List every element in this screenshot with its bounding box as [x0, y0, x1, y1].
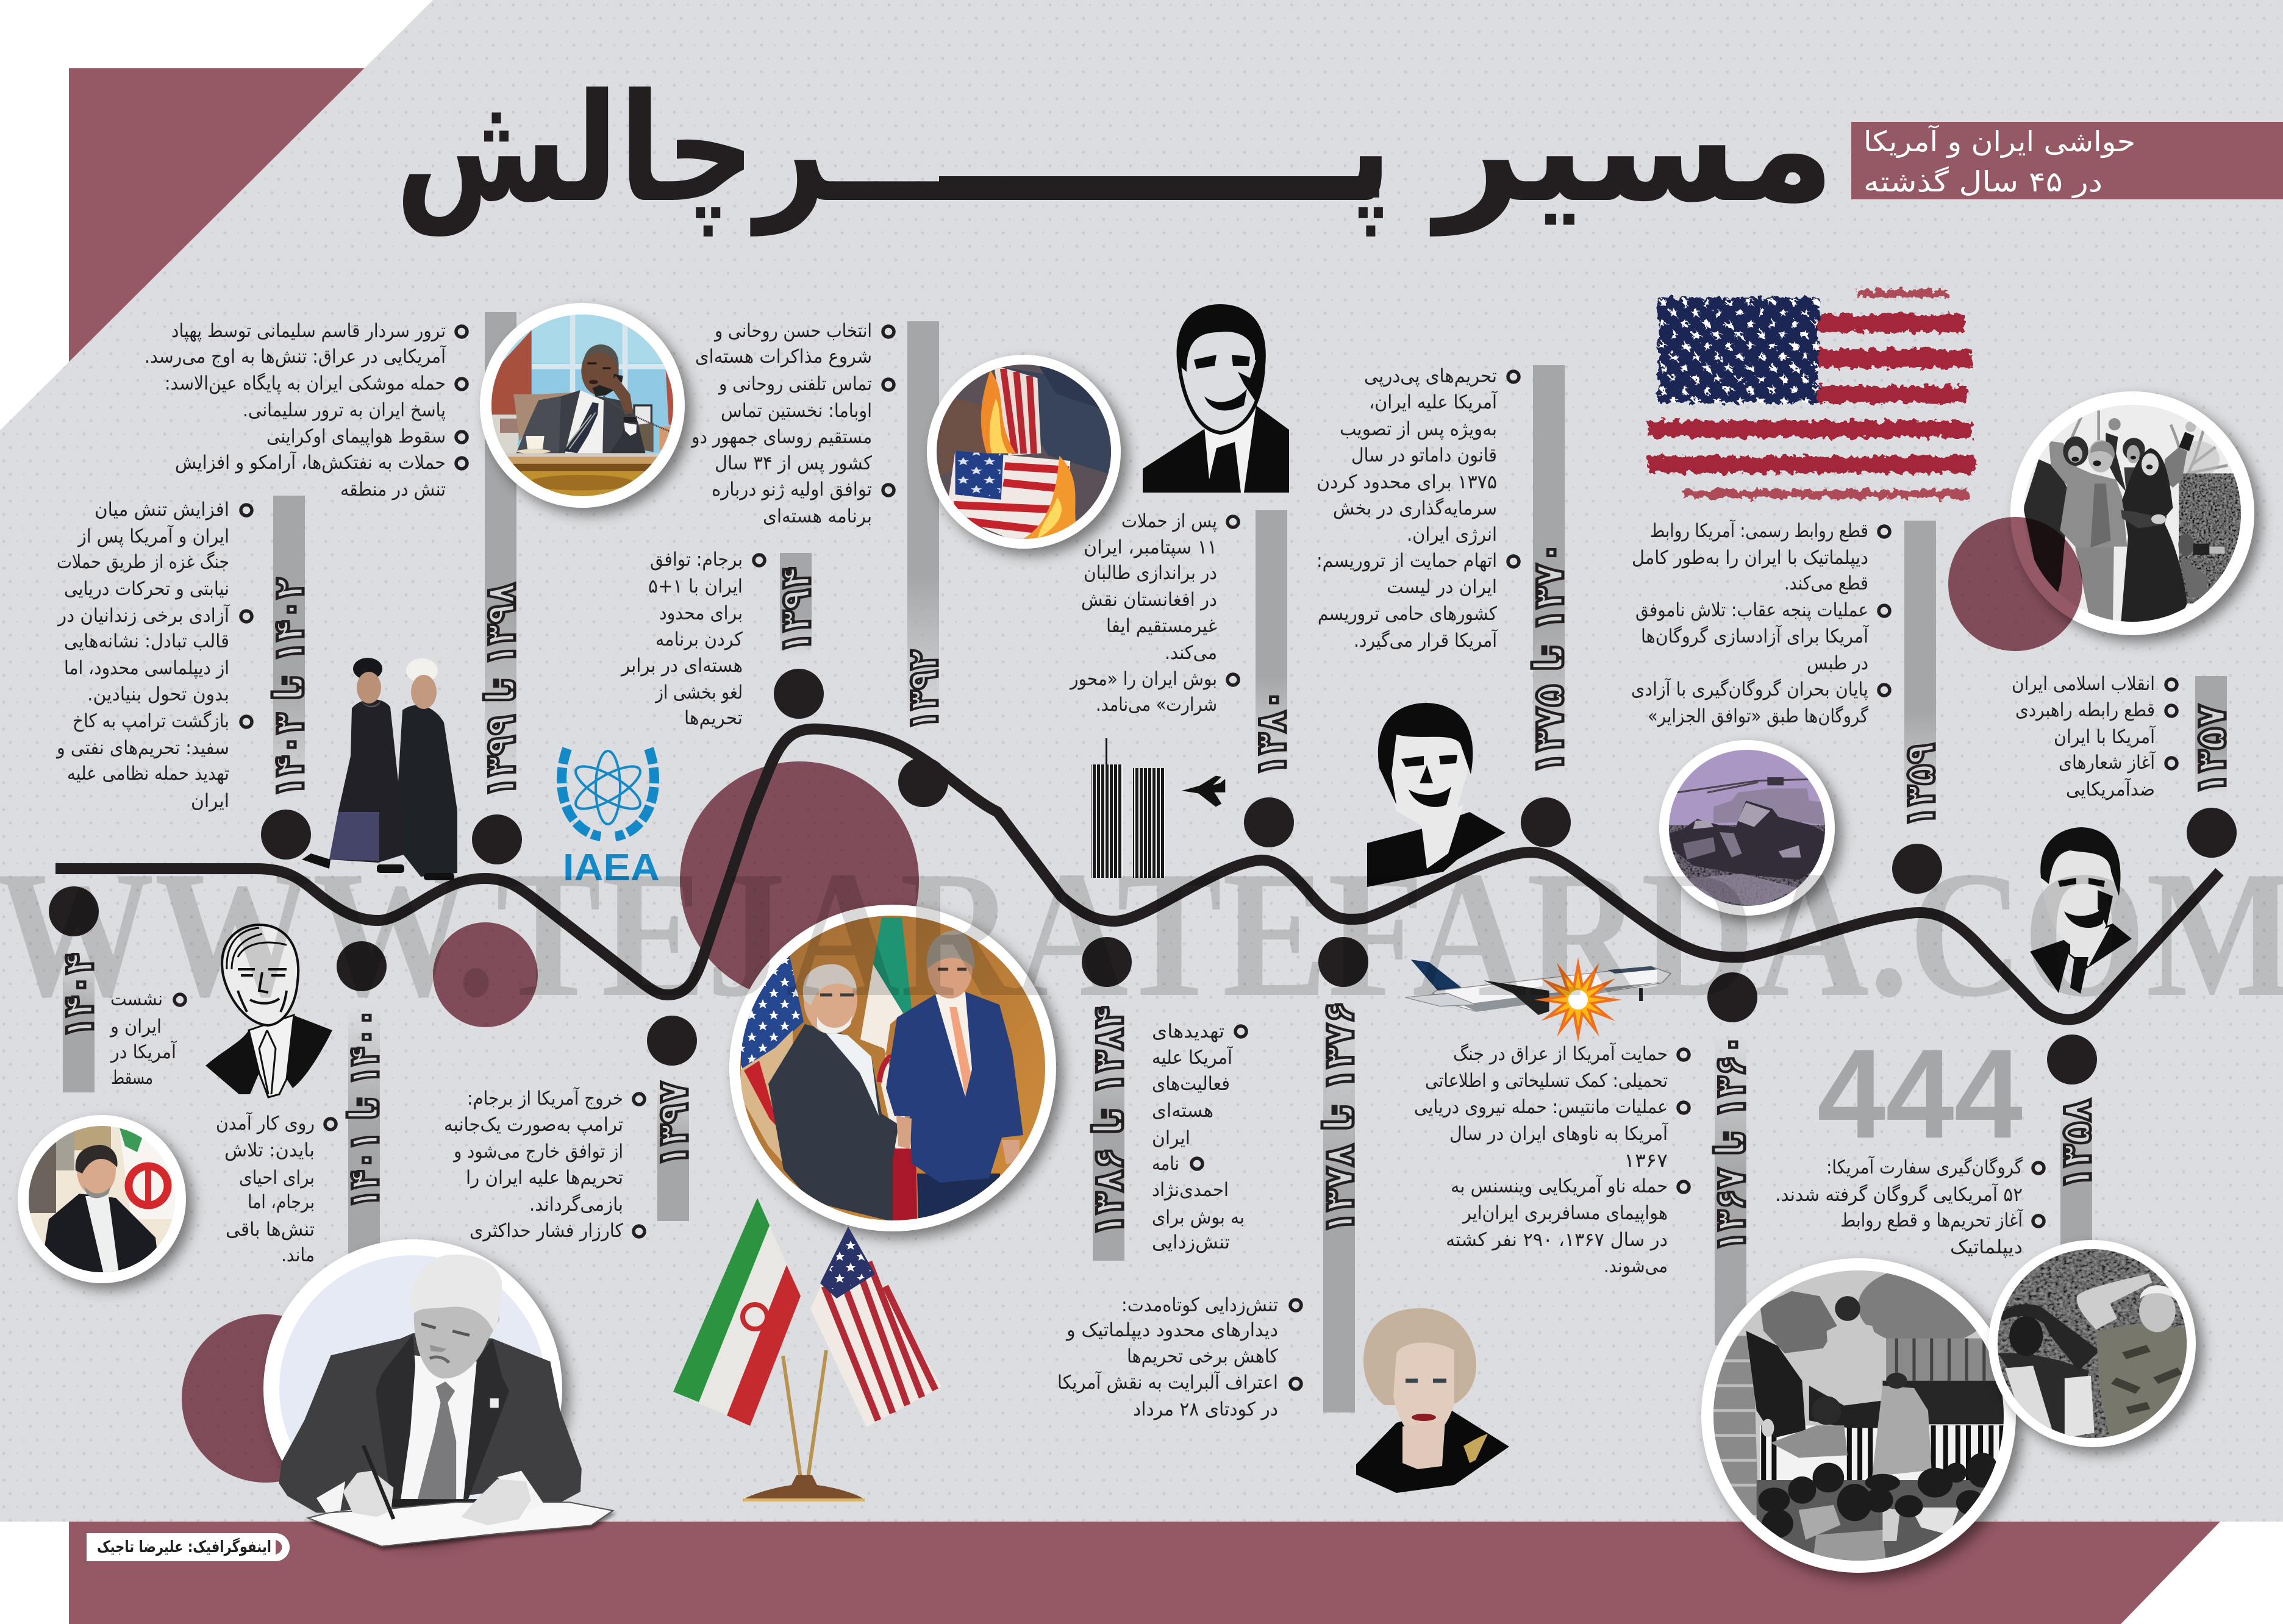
text block: 1404 events: نشست — [110, 988, 163, 1010]
image: Iran Air plane with explosion — [1405, 957, 1671, 1042]
photo: Obama on phone — [480, 303, 685, 508]
text block: 1400-1401 events: روی کار آمدن — [216, 1111, 315, 1134]
text block: 1360-1367 events: هواپیمای مسافربری ایران‌ایر — [1462, 1202, 1668, 1224]
text block: 1394 events: برجام: توافق — [650, 549, 743, 571]
text block: 1402-1403 events: نیابتی و تحرکات دریایی — [64, 578, 229, 600]
text block: 1402-1403 events: جنگ غزه از طریق حملات — [57, 551, 229, 573]
year bar 1370-1375: ۱۳۷۰ تا ۱۳۷۵ — [1525, 541, 1573, 774]
year bar 1402-1403: ۱۴۰۲ تا ۱۴۰۳ — [265, 577, 313, 797]
text block: 1404 events — [109, 988, 185, 1089]
text block: 1370-1375 events: اتهام حمایت از تروریسم: — [1317, 550, 1497, 572]
text block: 1402-1403 events: ایران — [191, 790, 229, 812]
text block: 1370-1375 events: به‌ویژه پس از تصویب — [1340, 418, 1497, 440]
text block: 1384-1386 events: به بوش برای — [1152, 1206, 1245, 1228]
year bar 1359 — [1896, 521, 1944, 827]
text block: 1380 events: غیرمستقیم ایفا — [1106, 615, 1217, 637]
text block: 1402-1403 events: آزادی برخی زندانیان در — [57, 604, 230, 627]
text block: 1380 events: در افغانستان نقش — [1081, 589, 1217, 611]
text block: 1384-1386 events: احمدی‌نژاد — [1152, 1179, 1229, 1201]
text block: 1359 events: قطع می‌کند. — [1784, 572, 1868, 594]
text block: 1402-1403 events: تهدید حمله نظامی علیه — [67, 763, 229, 785]
text block: 1397 events — [444, 1086, 645, 1242]
text block: 1360-1367 events: حمله ناو آمریکایی وینسنس به — [1451, 1174, 1668, 1197]
text block: 1392 events: تماس تلفنی روحانی و — [718, 373, 872, 395]
text block: 1360-1367 events — [1414, 1042, 1689, 1277]
text block: 1370-1375 events: ۱۳۷۵ برای محدود کردن — [1317, 471, 1497, 493]
text block: detente events — [1057, 1294, 1301, 1420]
text block: 1397 events: تحریم‌ها علیه ایران را — [466, 1167, 623, 1189]
text block: 1358 events: دیپلماتیک — [1950, 1236, 2023, 1258]
silhouette: Bill Clinton — [1367, 703, 1506, 887]
text block: 1359 events — [1631, 519, 1890, 727]
text block: 1394 events: لغو بخشی از — [654, 682, 743, 703]
text block: detente events: تنش‌زدایی کوتاه‌مدت: — [1121, 1294, 1278, 1316]
text block: 1398-1399 events: سقوط هواپیمای اوکراینی — [266, 426, 446, 447]
text block: 1384-1386 events: ایران — [1152, 1127, 1190, 1149]
photo: Araghchi — [18, 1115, 186, 1283]
text block: 1398-1399 events: حملات به نفتکش‌ها، آرامکو و افزایش — [175, 451, 446, 474]
image: distressed US flag — [1649, 290, 1975, 499]
year bar 1404: ۱۴۰۴ — [55, 953, 102, 1038]
text block: 1398-1399 events: تنش در منطقه — [340, 479, 446, 500]
year bar 1357: ۱۳۵۷ — [2187, 705, 2235, 795]
text block: 1392 events: توافق اولیه ژنو درباره — [712, 479, 872, 500]
text block: 1359 events: گروگان‌ها طبق «توافق الجزایر» — [1648, 705, 1868, 727]
text block: 1360-1367 events: در سال ۱۳۶۷، ۲۹۰ نفر کشته — [1446, 1229, 1668, 1251]
timeline dots — [49, 669, 2237, 1084]
text block: 1357 events — [2012, 673, 2177, 800]
text block: 1400-1401 events: ماند. — [281, 1244, 315, 1266]
text block: 1380 events: بوش ایران را «محور — [1069, 668, 1217, 690]
photo: Tabas helicopter wreck — [1659, 740, 1835, 916]
photo: burning US flag — [927, 355, 1125, 554]
year bar 1392: ۱۳۹۲ — [899, 650, 947, 730]
text block: 1397 events: ترامپ به‌صورت یک‌جانبه — [444, 1114, 623, 1136]
text block: 1358 events: آغاز تحریم‌ها و قطع روابط — [1840, 1208, 2023, 1231]
text block: 1398-1399 events: حمله موشکی ایران به پایگاه عین‌الاسد: — [165, 372, 446, 394]
text block: 1394 events: هسته‌ای در برابر — [620, 655, 743, 677]
illustration: Margaret Thatcher — [1356, 1308, 1509, 1493]
year bar 1360-1367: ۱۳۶۰ تا ۱۳۶۷ — [1707, 1034, 1754, 1252]
text block: 1380 events: پس از حملات — [1121, 510, 1217, 532]
text block: 1402-1403 events — [55, 499, 252, 812]
silhouette: Ronald Reagan — [2030, 827, 2132, 994]
text block: 1397 events: بازمی‌گرداند. — [529, 1194, 623, 1216]
text block: 1392 events: انتخاب حسن روحانی و — [713, 320, 872, 342]
text block: 1370-1375 events: انرژی ایران. — [1407, 524, 1497, 546]
text block: 1392 events: شروع مذاکرات هسته‌ای — [695, 346, 872, 368]
year bar 1360-1367 — [1707, 1034, 1754, 1345]
text block: 1404 events: آمریکا در — [110, 1040, 177, 1063]
text block: 1359 events: دیپلماتیک با ایران را به‌طور کامل — [1632, 547, 1868, 569]
subtitle box: حواشی ایران و آمریکا — [1863, 125, 2135, 158]
text block: 1392 events: برنامه هسته‌ای — [763, 505, 872, 527]
text block: detente events: کاهش برخی تحریم‌ها — [1127, 1345, 1278, 1367]
photo: embassy fence crowd — [1701, 1258, 2016, 1573]
text block: 1400-1401 events: برای احیای — [239, 1167, 315, 1189]
text block: 1398-1399 events: پاسخ ایران به ترور سلیمانی. — [243, 399, 446, 421]
text block: 1397 events: از توافق خارج می‌شود و — [452, 1141, 623, 1163]
text block: 1359 events: آمریکا برای آزادسازی گروگان‌ها — [1641, 624, 1869, 647]
year bar 1398-1399 — [477, 312, 524, 797]
text block: 1397 events: کارزار فشار حداکثری — [470, 1220, 623, 1242]
text block: 1384-1386 events — [1152, 1020, 1246, 1253]
text block: 1359 events: پایان بحران گروگان‌گیری با آزادی — [1631, 677, 1868, 700]
year bar 1380: ۱۳۸۰ — [1248, 689, 1295, 777]
text block: detente events: در کودتای ۲۸ مرداد — [1133, 1398, 1278, 1420]
text block: 1402-1403 events: بازگشت ترامپ به کاخ — [73, 710, 229, 732]
text block: 1370-1375 events: آمریکا علیه ایران، — [1369, 390, 1498, 413]
icon: plane — [1182, 776, 1225, 807]
year bar 1397: ۱۳۹۷ — [649, 1081, 697, 1167]
text block: 1358 events: گروگان‌گیری سفارت آمریکا: — [1826, 1155, 2023, 1178]
year bar 1400-1401: ۱۴۰۰ تا ۱۴۰۱ — [340, 1008, 388, 1208]
text block: 1398-1399 events: ترور سردار قاسم سلیمانی توسط پهپاد — [171, 320, 446, 342]
text block: 1359 events: عملیات پنجه عقاب: تلاش ناموفق — [1635, 599, 1868, 621]
silhouette: George W. Bush — [1143, 306, 1289, 493]
year bar 1359: ۱۳۵۹ — [1896, 743, 1944, 827]
logo: IAEA — [562, 749, 660, 889]
year bar 1370-1375 — [1525, 365, 1573, 774]
photo: Trump signing — [263, 1239, 613, 1547]
text block: 1402-1403 events: از دیپلماسی محدود، اما — [64, 657, 229, 679]
year bar 1358: ۱۳۵۸ — [2053, 1099, 2100, 1190]
figures: Raisi and Rouhani — [302, 658, 457, 880]
text block: 1380 events: می‌کند. — [1165, 642, 1217, 664]
text block: 1398-1399 events: آمریکایی در عراق: تنش‌ها به اوج می‌رسد. — [145, 344, 446, 368]
text block: 1358 events: ۵۲ آمریکایی گروگان گرفته شدند. — [1775, 1183, 2023, 1206]
text block: 1400-1401 events — [216, 1111, 336, 1266]
text block: 1402-1403 events: سفید: تحریم‌های نفتی و — [55, 737, 229, 759]
text block: 1392 events: کشور پس از ۳۴ سال — [715, 452, 872, 474]
text block: detente events: اعتراف آلبرایت به نقش آمریکا — [1057, 1370, 1278, 1394]
text block: 1370-1375 events — [1317, 365, 1519, 652]
text block: 1400-1401 events: برجام، اما — [248, 1191, 315, 1213]
text block: 1357 events: قطع رابطه راهبردی — [2015, 699, 2155, 721]
subtitle box: در ۴۵ سال گذشته — [1863, 165, 2103, 198]
text block: 1360-1367 events: آمریکا به ناوهای ایران در سال — [1449, 1122, 1668, 1145]
credit tag: اینفوگرافیک: علیرضا تاجیک — [97, 1537, 271, 1556]
text block: 1397 events: خروج آمریکا از برجام: — [467, 1086, 623, 1109]
text block: 1404 events: مسقط — [111, 1067, 153, 1089]
year bar 1392 — [899, 321, 947, 730]
decorative circle over revolution photo — [1948, 517, 2082, 651]
text block: 1402-1403 events: افزایش تنش میان — [95, 499, 229, 521]
text block: 1392 events: مستقیم روسای جمهور دو — [690, 426, 872, 448]
logo: IAEA: IAEA — [563, 847, 660, 889]
text block: 1384-1386 events: فعالیت‌های — [1152, 1073, 1230, 1095]
year bar 1376-1378: ۱۳۷۶ تا ۱۳۷۸ — [1315, 1001, 1363, 1234]
text block: 1360-1367 events: تحمیلی: کمک تسلیحاتی و اطلاعاتی — [1425, 1070, 1668, 1092]
decorative circle left — [433, 922, 538, 1027]
year bar 1398-1399: ۱۳۹۸ تا ۱۳۹۹ — [477, 583, 524, 797]
decorative circle behind Trump — [182, 1314, 350, 1483]
text block: 1394 events: برای محدود — [659, 602, 743, 624]
year bar 1394: ۱۳۹۴ — [772, 567, 820, 654]
text block: 1360-1367 events: حمایت آمریکا از عراق در جنگ — [1453, 1042, 1668, 1065]
text block: 1370-1375 events: آمریکا قرار می‌گیرد. — [1354, 629, 1498, 652]
text graphic: 444: 444 — [1817, 1024, 2023, 1165]
text block: 1404 events: ایران و — [109, 1016, 162, 1038]
text block: 1384-1386 events: هسته‌ای — [1152, 1100, 1213, 1122]
image: US table flag — [810, 1227, 941, 1427]
text block: 1380 events: شرارت» می‌نامد. — [1096, 694, 1217, 716]
text block: 1392 events: اوباما: نخستین تماس — [721, 400, 872, 422]
text block: 1392 events — [690, 320, 894, 527]
photo: Zarif and Kerry handshake — [729, 905, 1056, 1231]
text block: 1380 events: ۱۱ سپتامبر، ایران — [1084, 536, 1217, 558]
text block: 1402-1403 events: قالب تبادل: نشانه‌هایی — [64, 630, 229, 652]
text block: 1370-1375 events: سرمایه‌گذاری در بخش — [1333, 497, 1497, 519]
image: Iran table flag — [673, 1198, 801, 1426]
panel: maroon corner top-left — [69, 68, 366, 366]
text block: 1380 events: در براندازی طالبان — [1084, 562, 1217, 584]
title: پــــــــــــرچالش — [395, 62, 1392, 237]
text block: 1384-1386 events: تهدیدهای — [1152, 1020, 1224, 1042]
text block: 1400-1401 events: بایدن: تلاش — [224, 1139, 315, 1161]
text block: 1358 events — [1775, 1155, 2044, 1258]
image: flag stand — [743, 1350, 865, 1501]
text block: 1370-1375 events: تحریم‌های پی‌درپی — [1364, 365, 1497, 387]
text block: 1370-1375 events: قانون داماتو در سال — [1351, 444, 1497, 466]
text block: 1398-1399 events — [145, 320, 467, 500]
text block: 1394 events: ایران با ۱+۵ — [648, 575, 743, 597]
text block: 1357 events: آمریکا با ایران — [2054, 725, 2156, 748]
text block: 1394 events: تحریم‌ها — [684, 707, 743, 729]
photo: revolution crowd — [2010, 391, 2254, 635]
text block: 1394 events: کردن برنامه — [656, 629, 743, 650]
text block: 1380 events — [1069, 510, 1238, 716]
text block: 1384-1386 events: نامه — [1152, 1153, 1179, 1175]
text block: 1360-1367 events: عملیات مانتیس: حمله نیروی دریایی — [1414, 1096, 1668, 1118]
text block: detente events: دیدارهای محدود دیپلماتیک و — [1065, 1319, 1278, 1341]
text block: 1357 events: ضدآمریکایی — [2066, 777, 2155, 800]
title: مسیر — [1429, 62, 1835, 237]
panel: maroon footer band — [69, 1522, 2220, 1624]
text block: 1370-1375 events: ایران در لیست — [1387, 576, 1497, 598]
text block: 1370-1375 events: کشورهای حامی تروریسم — [1318, 603, 1497, 625]
text block: 1357 events: آغاز شعارهای — [2059, 750, 2156, 774]
text block: 1359 events: در طبس — [1807, 652, 1868, 674]
credit tag — [87, 1533, 290, 1561]
icon: twin towers — [1091, 738, 1165, 878]
photo: American hostages — [1988, 1240, 2198, 1447]
decorative circle center — [680, 761, 919, 1000]
year bar 1380 — [1248, 510, 1295, 777]
text block: 1360-1367 events: می‌شوند. — [1604, 1255, 1668, 1277]
text block: 1357 events: انقلاب اسلامی ایران — [2012, 673, 2155, 695]
text block: 1402-1403 events: بدون تحول بنیادین. — [87, 683, 229, 705]
text block: 1402-1403 events: ایران و آمریکا پس از — [77, 524, 229, 547]
text block: 1360-1367 events: ۱۳۶۷ — [1624, 1150, 1668, 1172]
year bar 1376-1378 — [1315, 1001, 1363, 1412]
year bar 1358 — [2053, 1099, 2100, 1245]
text block: 1384-1386 events: آمریکا علیه — [1152, 1045, 1233, 1069]
line drawing: Joe Biden — [205, 925, 332, 1097]
year bar 1384-1386: ۱۳۸۴ تا ۱۳۸۶ — [1085, 1006, 1132, 1236]
text block: 1384-1386 events: تنش‌زدایی — [1152, 1231, 1230, 1253]
year bar 1404 — [55, 953, 102, 1092]
text block: 1400-1401 events: تنش‌ها باقی — [226, 1219, 315, 1241]
text block: 1394 events — [620, 549, 765, 729]
subtitle box — [1851, 122, 2283, 199]
timeline curve — [55, 729, 2220, 1019]
text block: 1359 events: قطع روابط رسمی: آمریکا روابط — [1650, 519, 1868, 542]
year bar 1397 — [649, 1081, 697, 1221]
